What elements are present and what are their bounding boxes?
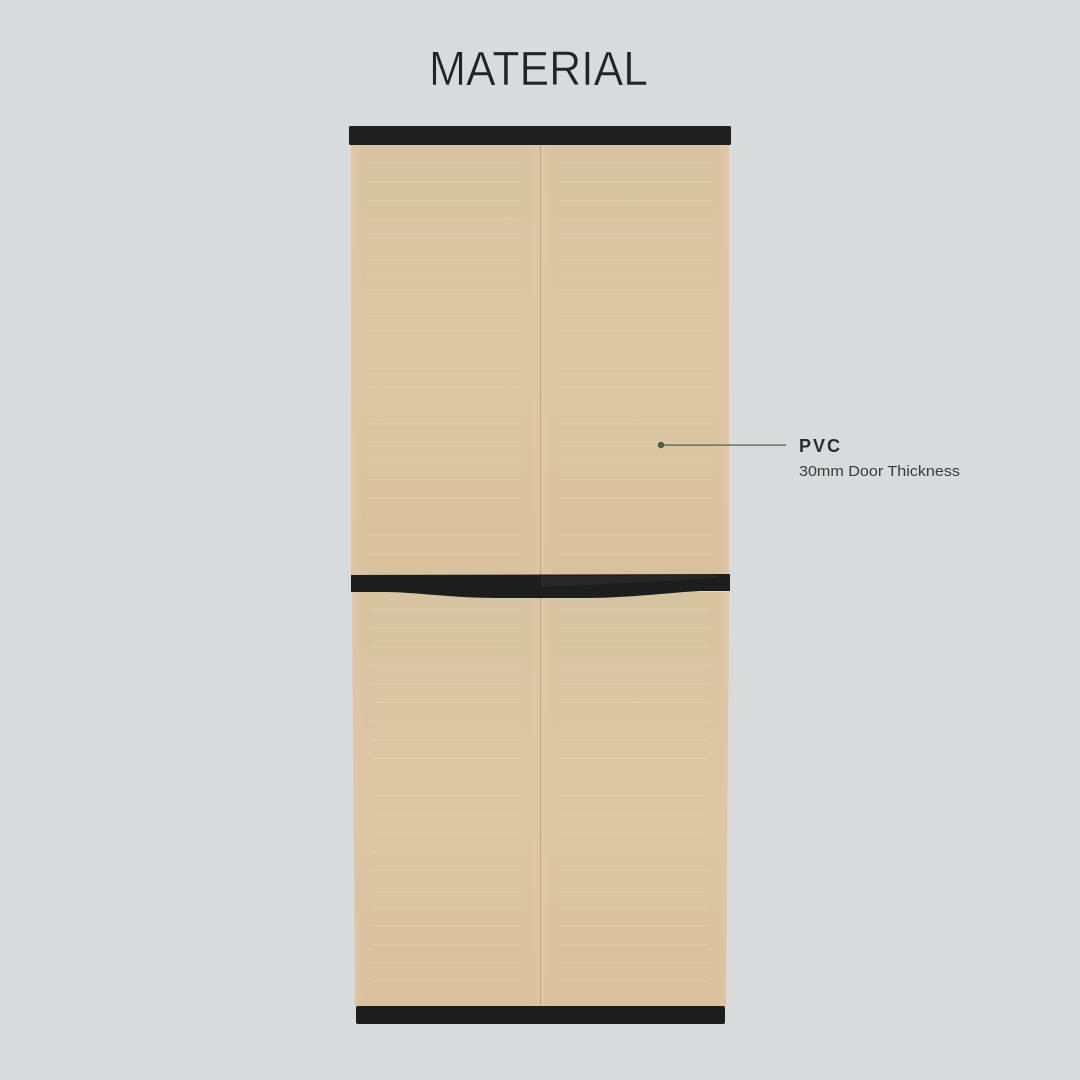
title: MATERIAL <box>429 43 648 96</box>
cabinet product image <box>349 126 731 1024</box>
callout: PVC <box>658 436 960 480</box>
handle bar <box>351 574 730 598</box>
lower left door <box>352 592 540 1007</box>
bottom plinth <box>356 1006 725 1024</box>
handle highlight <box>541 575 718 587</box>
callout description: 30mm Door Thickness <box>799 463 960 480</box>
lower right door <box>541 592 729 1007</box>
door gap <box>540 145 541 1007</box>
top cap <box>349 126 731 145</box>
callout marker dot <box>658 442 664 448</box>
upper right door <box>541 145 729 576</box>
upper left door <box>351 145 540 576</box>
callout heading: PVC <box>799 436 840 456</box>
callout leader line <box>661 444 786 446</box>
